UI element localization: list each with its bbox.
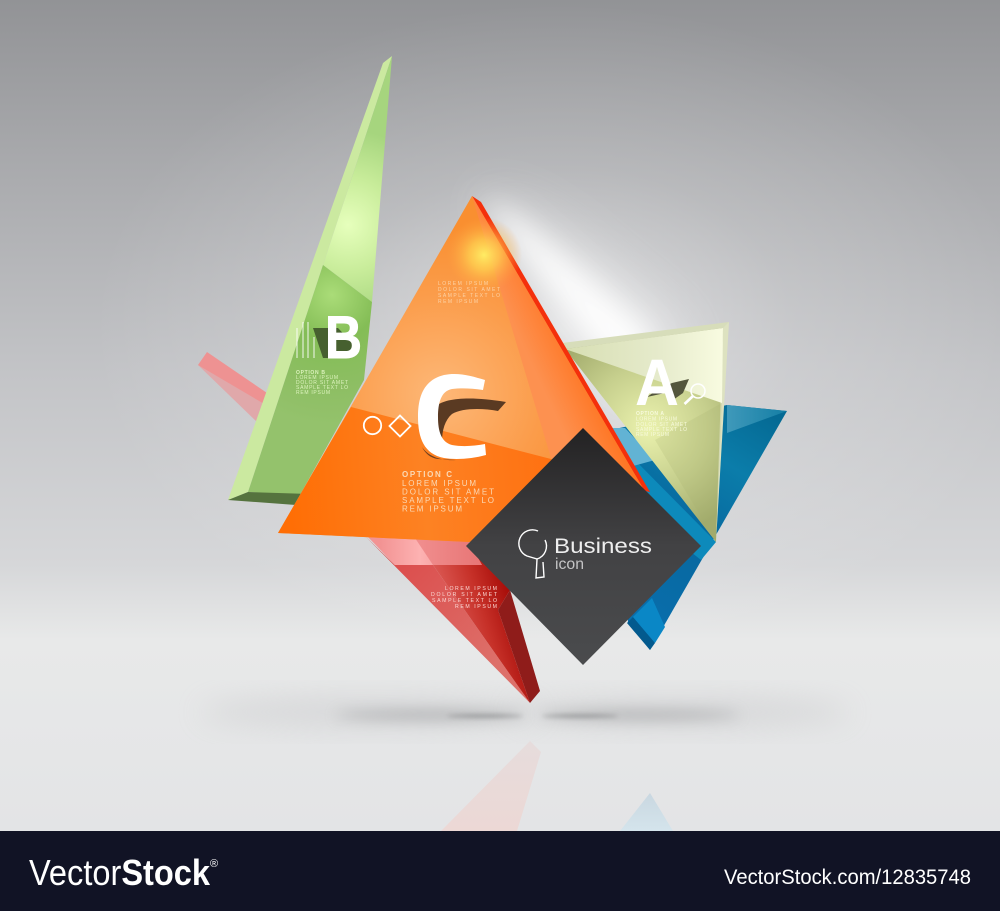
yellow highlight [446,217,522,293]
panel: dark diamond [466,428,701,665]
red text: SAMPLE TEXT LO [432,598,497,604]
blue tip facet [633,598,665,643]
letter B: B [325,304,362,371]
option B text [296,370,348,396]
upper text: REM IPSUM [438,299,478,305]
letter C [418,374,486,459]
C fold shadow [434,399,506,442]
red text: LOREM IPSUM [445,586,497,592]
C bottom shadow [422,447,456,460]
blue highlight top [727,405,787,433]
business label: Business [554,535,652,558]
vectorstock logo: VectorStock [29,852,211,893]
panel: blue triangle [600,405,787,650]
option A text: DOLOR SIT AMET [636,422,687,428]
option B text: REM IPSUM [296,390,330,396]
red reflection [441,741,541,831]
orange face [278,196,644,560]
olive facet [655,403,722,542]
upper text: SAMPLE TEXT LO [438,293,500,299]
olive gloss [565,328,723,403]
upper text: DOLOR SIT AMET [438,287,500,293]
option A text [636,411,687,438]
option A text: REM IPSUM [636,432,669,438]
upper text [438,281,500,305]
panel: olive triangle A [562,322,729,542]
red text: REM IPSUM [455,604,497,610]
option C text: SAMPLE TEXT LO [402,496,494,505]
option A text: LOREM IPSUM [636,416,677,422]
icon label: icon [555,556,584,573]
orange lower band [278,407,644,560]
option B text: OPTION B [296,370,325,376]
registered mark: ® [210,858,218,870]
icon: bars [297,322,314,358]
blue strip [600,450,716,560]
blue reflection [620,793,673,831]
red top strip [368,537,482,565]
red left facet [366,537,530,703]
option A text: SAMPLE TEXT LO [636,427,687,433]
olive face [565,328,723,542]
green left bevel [228,56,392,500]
footer bar [0,831,1000,911]
blue light strip [612,428,655,466]
glow behind orange triangle [478,190,680,420]
A fold shadow [647,379,689,400]
option B text: DOLOR SIT AMET [296,380,348,386]
green lower face [248,265,372,495]
panel: green shard B [228,56,392,505]
option C text: OPTION C [402,470,452,479]
panel: red shard [198,352,540,703]
option C text: LOREM IPSUM [402,479,476,488]
upper text: LOREM IPSUM [438,281,488,287]
olive bevel [562,322,729,349]
red text: DOLOR SIT AMET [431,592,498,598]
icon: business bulb [519,530,546,578]
option B text: SAMPLE TEXT LO [296,385,348,391]
icon: magnifier [684,384,705,404]
red right facet [433,540,530,703]
orange right facet [472,196,644,490]
red text [431,586,498,610]
option C text [402,470,494,514]
floor shadow [200,696,850,728]
option B text: LOREM IPSUM [296,375,338,381]
red bevel [498,590,540,703]
image id: VectorStock.com/12835748 [724,866,971,889]
letter A: A [635,345,679,419]
option C text: DOLOR SIT AMET [402,488,494,496]
green bottom bevel [228,492,310,505]
icon: circle [364,417,381,434]
option A text: OPTION A [636,411,664,417]
orange red edge [472,196,650,492]
option C text: REM IPSUM [402,504,462,514]
green upper face [323,56,392,302]
blue bevel [627,617,655,650]
icon: diamond [390,416,410,436]
pink band [198,352,270,412]
panel: orange triangle C [278,196,650,560]
B fold shadow [313,328,354,358]
